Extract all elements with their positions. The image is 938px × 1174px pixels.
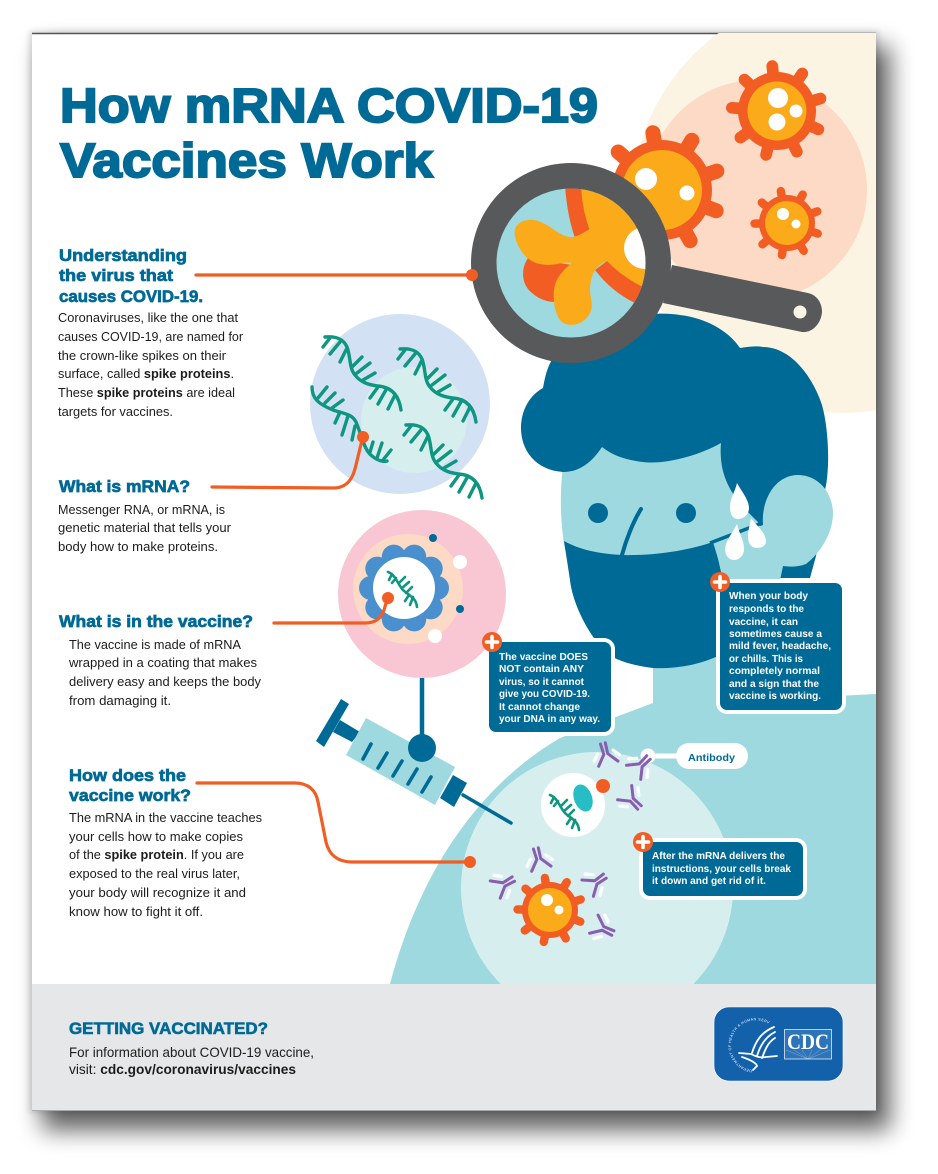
HHS seal <box>728 1018 778 1072</box>
icon: plus <box>710 572 730 592</box>
body text: delivery easy and keeps the body <box>69 674 261 689</box>
section: what is in the vaccine <box>59 612 261 708</box>
body text: genetic material that tells your <box>58 520 232 535</box>
heading: Understanding <box>59 246 187 265</box>
body text: causes COVID-19, are named for <box>58 329 244 344</box>
HHS seal: DEPARTMENT OF HEALTH & HUMAN SERVICES USA <box>728 1018 770 1072</box>
callout: side effects: vaccine, it can <box>729 616 798 628</box>
section: what is mRNA <box>58 477 232 554</box>
callout: vaccine does not contain virus: your DNA in any way. <box>499 713 600 725</box>
illustration: virus top right <box>728 61 826 158</box>
person: body and neck <box>390 590 876 984</box>
callout: vaccine does not contain virus <box>482 632 615 736</box>
body text: targets for vaccines. <box>58 404 173 419</box>
background circles <box>640 33 876 413</box>
body text <box>58 310 244 419</box>
body text: know how to fight it off. <box>69 904 203 919</box>
callout: side effects: responds to the <box>729 603 804 615</box>
title: Vaccines Work <box>60 135 433 188</box>
heading: What is mRNA? <box>59 477 190 496</box>
section: how does the vaccine work <box>69 766 262 919</box>
callout: cells break down mRNA <box>633 832 807 900</box>
callout: side effects: mild fever, headache, <box>729 640 831 652</box>
callout: cells break down mRNA: it down and get rid of it. <box>652 875 766 887</box>
icon: plus <box>482 632 502 652</box>
body text <box>58 502 232 554</box>
body text: The mRNA in the vaccine teaches <box>69 810 262 825</box>
magnifying glass <box>471 163 822 363</box>
inner pale circle on chest <box>461 752 732 984</box>
title <box>60 80 598 188</box>
footer heading: GETTING VACCINATED? <box>69 1020 268 1038</box>
heading <box>69 766 191 805</box>
callout: side effects: When your body <box>729 590 808 602</box>
eyes <box>588 503 696 523</box>
body text: exposed to the real virus later, <box>69 866 240 881</box>
icon: plus <box>633 832 653 852</box>
antibodies around cell <box>590 740 658 817</box>
connector: virus to magnifier <box>196 269 478 281</box>
body text: the crown-like spikes on their <box>58 348 227 363</box>
illustration: vaccine particle circle <box>338 510 506 678</box>
callout: side effects: completely normal <box>729 665 820 677</box>
illustration: syringe <box>316 678 511 823</box>
heading: causes COVID-19. <box>59 287 203 306</box>
connector: vaccine to particle <box>274 592 394 623</box>
callout: side effects: and a sign that the <box>729 678 819 690</box>
lens contents <box>496 188 646 338</box>
body text: body how to make proteins. <box>58 539 218 554</box>
body text: from damaging it. <box>69 693 171 708</box>
coating <box>359 545 449 631</box>
connector: vaccine work to virus <box>197 783 476 868</box>
CDC mark: CDC <box>787 1029 829 1054</box>
callout: side effects <box>710 572 846 714</box>
body text <box>68 637 261 708</box>
body text: your cells how to make copies <box>69 829 243 844</box>
footer band <box>32 984 876 1111</box>
mask <box>564 541 725 668</box>
handle <box>663 265 822 332</box>
heading: vaccine work? <box>69 786 191 805</box>
body text: your body will recognize it and <box>69 885 246 900</box>
title: How mRNA COVID-19 <box>60 80 598 133</box>
callout: vaccine does not contain virus: NOT contain ANY <box>499 663 584 675</box>
rim <box>471 163 671 363</box>
illustration: virus with antibodies <box>489 845 618 945</box>
footer text: For information about COVID-19 vaccine, <box>69 1044 314 1060</box>
callout: vaccine does not contain virus: The vaccine DOES <box>499 651 588 663</box>
callout: side effects: sometimes cause a <box>729 628 822 640</box>
body text: of the spike protein. If you are <box>69 847 244 862</box>
footer text: visit: cdc.gov/coronavirus/vaccines <box>69 1061 296 1077</box>
body text: Coronaviruses, like the one that <box>58 310 238 325</box>
face <box>561 430 765 570</box>
illustration: small virus <box>749 185 824 259</box>
person: head <box>521 314 833 668</box>
body text: Messenger RNA, or mRNA, is <box>58 502 225 517</box>
callout: vaccine does not contain virus: virus, so it cannot <box>499 676 584 688</box>
illustration: large virus behind magnifier <box>597 124 727 253</box>
body text: wrapped in a coating that makes <box>68 655 257 670</box>
callout: side effects: or chills. This is <box>729 653 803 665</box>
heading: How does the <box>69 766 186 785</box>
sweat drops <box>725 483 766 560</box>
footer text <box>69 1044 314 1077</box>
callout: vaccine does not contain virus: give you COVID-19. <box>499 688 590 700</box>
hair <box>521 314 828 578</box>
callout: cells break down mRNA: After the mRNA delivers the <box>652 850 785 862</box>
hand <box>715 475 833 590</box>
illustration: mRNA strands circle <box>310 314 490 498</box>
illustration: cell with mRNA <box>541 773 610 837</box>
body text <box>69 810 262 919</box>
nose <box>622 509 641 555</box>
callout: cells break down mRNA: instructions, your cells break <box>652 863 791 875</box>
section: understanding the virus <box>58 246 244 419</box>
heading <box>59 246 203 306</box>
antibody label <box>640 743 748 769</box>
heading: What is in the vaccine? <box>59 612 253 631</box>
callout: vaccine does not contain virus: It cannot change <box>499 701 580 713</box>
heading: the virus that <box>59 266 173 285</box>
body text: The vaccine is made of mRNA <box>69 637 241 652</box>
connector: mRNA to strand <box>212 431 369 488</box>
body text: surface, called spike proteins. <box>58 366 234 381</box>
strap <box>710 523 762 543</box>
antibody label: Antibody <box>688 752 735 764</box>
body text: These spike proteins are ideal <box>58 385 235 400</box>
callout: side effects: vaccine is working. <box>729 690 821 702</box>
